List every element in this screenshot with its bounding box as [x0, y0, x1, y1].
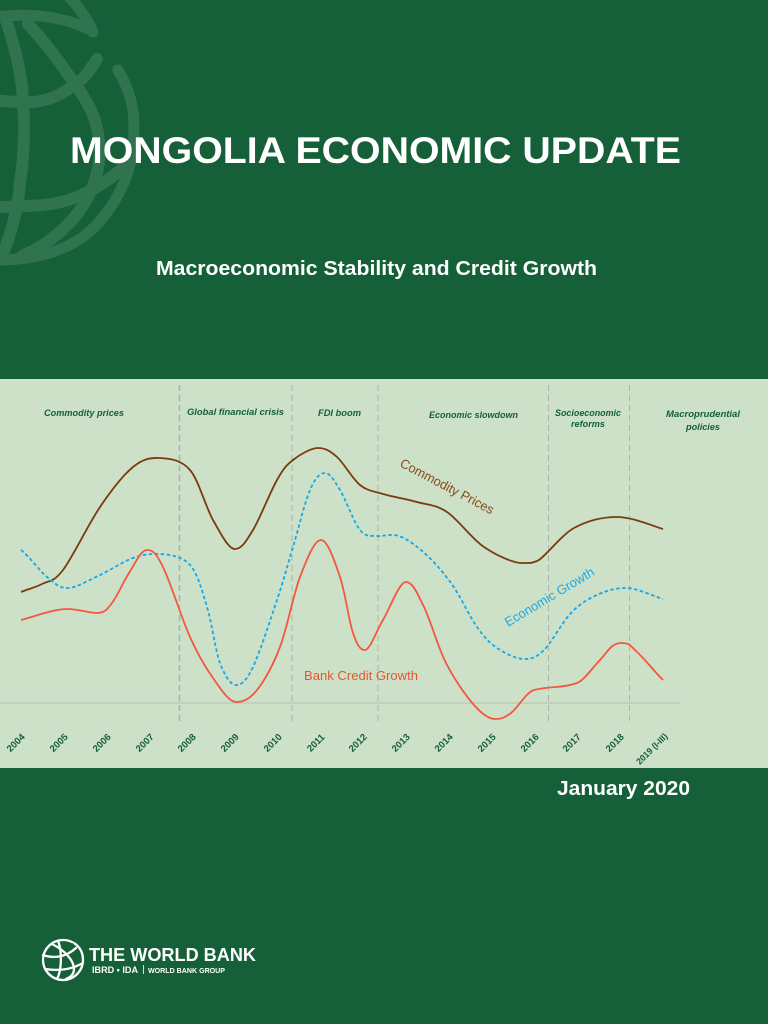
label: economic growth: Economic Growth [502, 564, 597, 630]
chart axis line [0, 702, 680, 704]
logo: the world bank [43, 940, 256, 980]
period headings: FDI boom [318, 408, 361, 418]
panel: chart band [0, 379, 768, 768]
period headings: Commodity prices [44, 408, 124, 418]
x-axis year labels: 2019 (I-III) [634, 731, 670, 767]
x-axis year labels: 2018 [604, 732, 627, 755]
x-axis year labels: 2007 [134, 732, 157, 755]
icon: logo globe [43, 940, 83, 980]
x-axis year labels: 2016 [519, 732, 542, 755]
line: commodity prices [21, 448, 663, 592]
period headings: Macroprudential [666, 409, 741, 419]
date: January 2020 [557, 778, 690, 800]
x-axis year labels: 2015 [476, 731, 499, 755]
logo tagline [92, 965, 225, 976]
period headings: Socioeconomic [555, 408, 621, 418]
logo tagline: WORLD BANK GROUP [148, 968, 225, 975]
x-axis year labels: 2004 [5, 731, 28, 755]
line: economic growth [21, 473, 663, 685]
label: commodity prices: Commodity Prices [398, 455, 497, 517]
icon: watermark globe [0, 0, 134, 260]
x-axis year labels: 2005 [48, 731, 71, 755]
x-axis year labels: 2013 [390, 732, 413, 755]
x-axis year labels: 2009 [219, 732, 242, 755]
x-axis year labels: 2006 [91, 732, 114, 755]
title: MONGOLIA ECONOMIC UPDATE [70, 130, 681, 171]
period dividers [180, 385, 630, 722]
x-axis year labels: 2011 [305, 732, 328, 754]
label: bank credit growth: Bank Credit Growth [304, 668, 418, 683]
period headings: Economic slowdown [429, 410, 518, 420]
x-axis year labels: 2008 [176, 732, 199, 755]
logo tagline: IBRD • IDA [92, 965, 138, 976]
period headings: Global financial crisis [187, 407, 284, 417]
period headings: policies [685, 422, 720, 432]
period headings: reforms [571, 419, 605, 429]
line: bank credit growth [21, 540, 663, 719]
x-axis year labels: 2014 [433, 731, 456, 755]
x-axis year labels: 2017 [561, 732, 584, 755]
x-axis year labels [5, 731, 670, 767]
subtitle: Macroeconomic Stability and Credit Growth [156, 258, 597, 280]
period headings [44, 407, 741, 432]
logo wordmark: THE WORLD BANK [89, 945, 256, 965]
x-axis year labels: 2010 [262, 732, 285, 755]
x-axis year labels: 2012 [347, 732, 370, 755]
